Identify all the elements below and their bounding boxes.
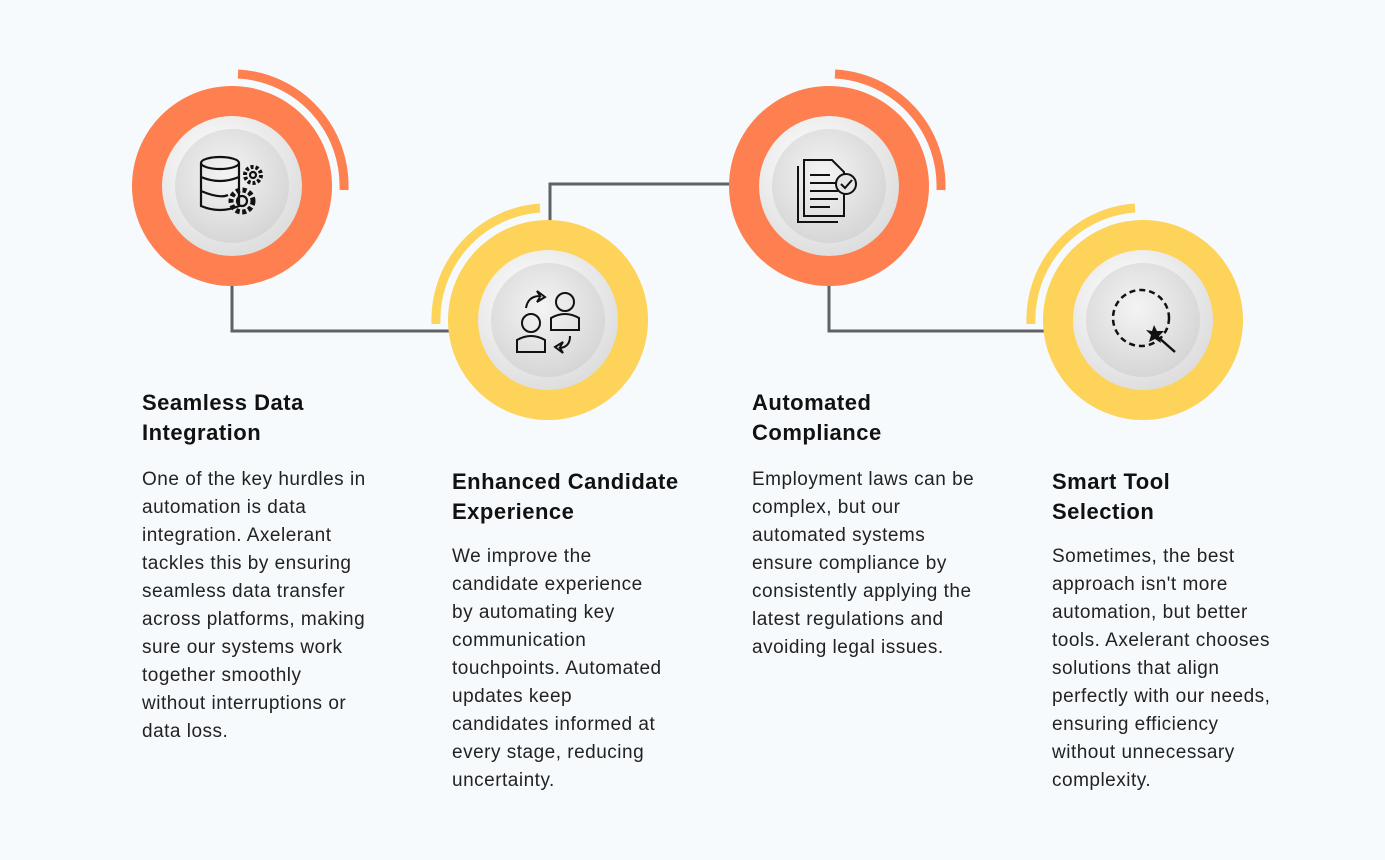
text 2: every stage, reducing: [452, 742, 644, 763]
text 1: tackles this by ensuring: [142, 553, 352, 574]
text 2: updates keep: [452, 686, 572, 707]
text 1: automation is data: [142, 497, 306, 518]
heading 4: Smart Tool: [1052, 469, 1170, 494]
text 3: consistently applying the: [752, 581, 972, 602]
connectors: [232, 184, 1045, 331]
text 2: communication: [452, 630, 586, 651]
heading 1: [142, 390, 304, 445]
text 2: candidates informed at: [452, 714, 655, 735]
circle 4: yellow: [1031, 208, 1243, 420]
heading 2: Enhanced Candidate: [452, 469, 679, 494]
text 4: automation, but better: [1052, 602, 1248, 623]
text 4: solutions that align: [1052, 658, 1219, 679]
heading 3: [752, 390, 882, 445]
text 4: ensuring efficiency: [1052, 714, 1219, 735]
icon: magic wand: [1113, 290, 1175, 352]
text 3: [752, 469, 974, 658]
text 1: sure our systems work: [142, 637, 343, 658]
text 2: [452, 546, 662, 791]
heading 3: Compliance: [752, 420, 882, 445]
text 3: ensure compliance by: [752, 553, 947, 574]
heading 2: Experience: [452, 499, 574, 524]
text 1: across platforms, making: [142, 609, 365, 630]
icon: database gears: [201, 157, 261, 212]
text 1: data loss.: [142, 721, 228, 742]
text 4: without unnecessary: [1052, 742, 1235, 763]
text 4: Sometimes, the best: [1052, 546, 1235, 567]
heading 4: Selection: [1052, 499, 1154, 524]
text 4: tools. Axelerant chooses: [1052, 630, 1270, 651]
text 2: touchpoints. Automated: [452, 658, 662, 679]
text 3: avoiding legal issues.: [752, 637, 944, 658]
text 4: perfectly with our needs,: [1052, 686, 1270, 707]
text 4: approach isn't more: [1052, 574, 1228, 595]
circle 2: yellow: [436, 208, 648, 420]
text 1: without interruptions or: [142, 693, 346, 714]
heading 3: Automated: [752, 390, 871, 415]
heading 4: [1052, 469, 1170, 524]
text 1: seamless data transfer: [142, 581, 345, 602]
text 1: [142, 469, 366, 742]
text 4: [1052, 546, 1270, 791]
text 1: together smoothly: [142, 665, 302, 686]
text 3: latest regulations and: [752, 609, 944, 630]
icon: document check: [798, 160, 856, 222]
text 2: candidate experience: [452, 574, 643, 595]
text 1: integration. Axelerant: [142, 525, 332, 546]
heading 2: [452, 469, 679, 524]
text 2: by automating key: [452, 602, 615, 623]
text 2: We improve the: [452, 546, 592, 567]
heading 1: Integration: [142, 420, 261, 445]
text 1: One of the key hurdles in: [142, 469, 366, 490]
text 2: uncertainty.: [452, 770, 555, 791]
heading 1: Seamless Data: [142, 390, 304, 415]
text 3: Employment laws can be: [752, 469, 974, 490]
icon: people exchange: [517, 291, 579, 353]
circle 1: orange: [132, 74, 344, 286]
text 3: automated systems: [752, 525, 925, 546]
text 3: complex, but our: [752, 497, 900, 518]
circle 3: orange: [729, 74, 941, 286]
text 4: complexity.: [1052, 770, 1151, 791]
